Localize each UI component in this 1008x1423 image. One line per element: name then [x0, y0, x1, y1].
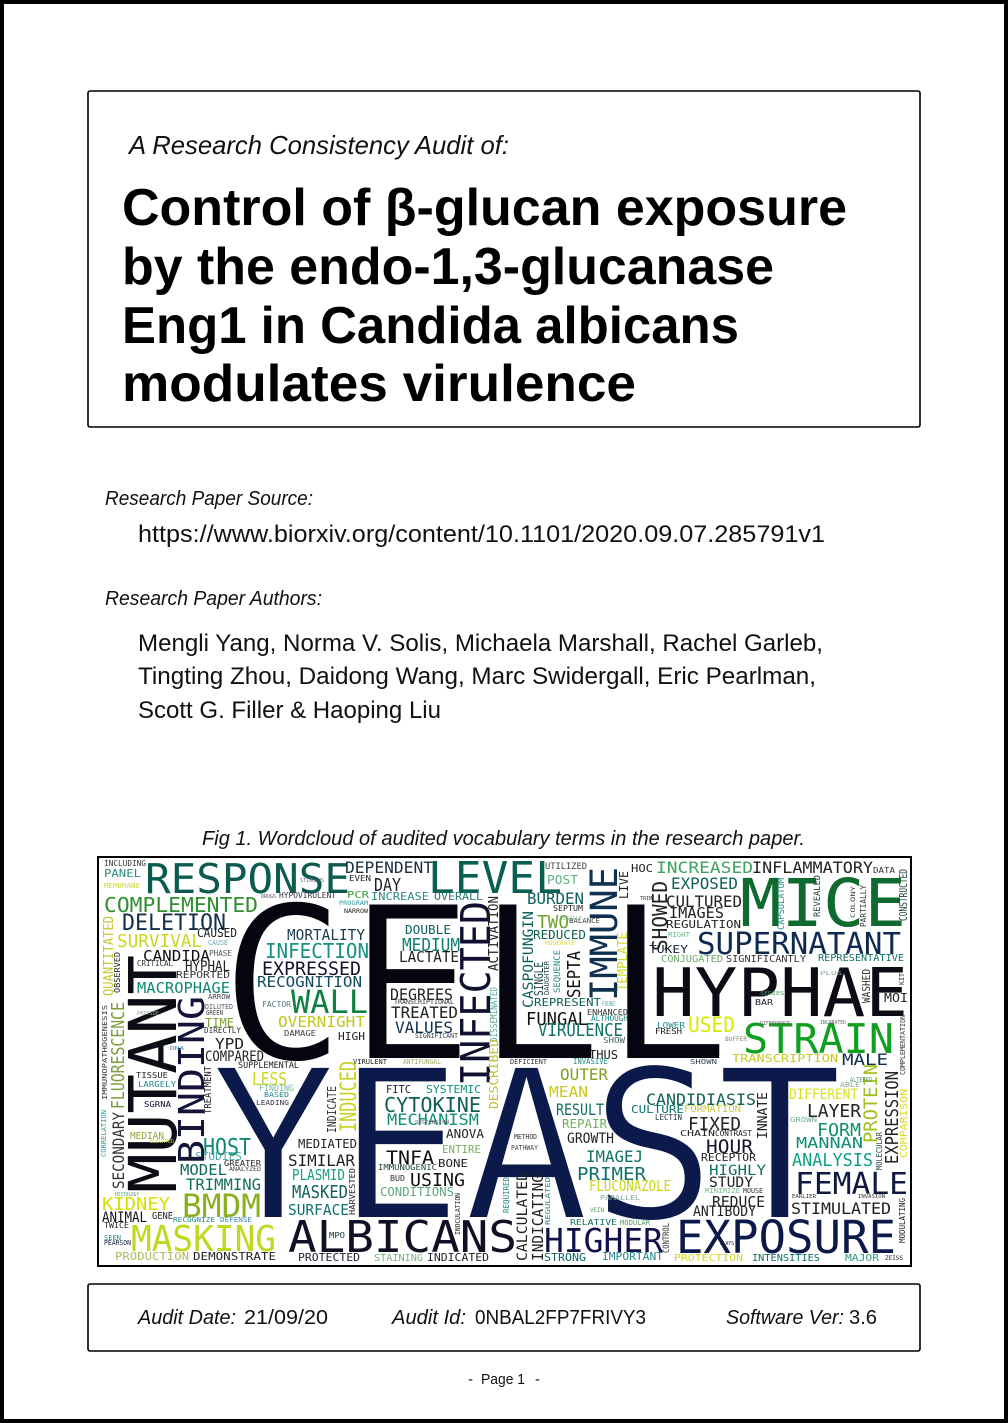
- wordcloud of vocabulary terms: PLAYS: [720, 1241, 734, 1247]
- wordcloud of vocabulary terms: OUTER: [560, 1065, 608, 1084]
- wordcloud of vocabulary terms: ALBICANS: [288, 1212, 517, 1263]
- wordcloud of vocabulary terms: PROTECTED: [298, 1251, 360, 1264]
- wordcloud of vocabulary terms: RECOGNIZE: [173, 1216, 215, 1224]
- wordcloud of vocabulary terms: SURFACE: [288, 1201, 349, 1219]
- wordcloud of vocabulary terms: FITC: [386, 1083, 411, 1096]
- wordcloud of vocabulary terms: INDICATED: [427, 1251, 489, 1264]
- wordcloud of vocabulary terms: TRIM: [640, 896, 652, 902]
- wordcloud of vocabulary terms: PARTIALLY: [859, 885, 868, 927]
- wordcloud of vocabulary terms: SECONDARY: [109, 1112, 128, 1189]
- wordcloud of vocabulary terms: MALE: [842, 1050, 888, 1069]
- wordcloud of vocabulary terms: DESCRIBED: [487, 1039, 501, 1109]
- wordcloud of vocabulary terms: COMPLEMENTATION: [899, 1015, 907, 1075]
- wordcloud of vocabulary terms: PRODUCTION: [115, 1250, 189, 1263]
- wordcloud of vocabulary terms: SEPTUM: [553, 904, 583, 913]
- wordcloud of vocabulary terms: PEARSON: [104, 1239, 131, 1247]
- wordcloud of vocabulary terms: DEPENDENT: [345, 858, 433, 877]
- wordcloud of vocabulary terms: RESPONSE: [145, 855, 350, 903]
- wordcloud of vocabulary terms: SURVIVAL: [117, 931, 202, 952]
- wordcloud of vocabulary terms: DOUBLE: [405, 923, 451, 937]
- wordcloud of vocabulary terms: FORM: [817, 1120, 861, 1141]
- wordcloud of vocabulary terms: FINDING: [259, 1084, 294, 1094]
- page number: [468, 1371, 540, 1388]
- wordcloud of vocabulary terms: LARGELY: [138, 1080, 176, 1089]
- wordcloud of vocabulary terms: REDUCED: [533, 928, 586, 942]
- wordcloud of vocabulary terms: COLONY: [850, 885, 857, 918]
- wordcloud of vocabulary terms: UTILIZED: [545, 862, 587, 872]
- wordcloud of vocabulary terms: CHAIN: [680, 1129, 715, 1138]
- wordcloud of vocabulary terms: INFECTION: [265, 939, 369, 963]
- wordcloud of vocabulary terms: ALTHOUGH: [591, 1014, 628, 1023]
- wordcloud of vocabulary terms: SYSTEMIC: [426, 1083, 481, 1096]
- research paper authors: [105, 588, 823, 724]
- wordcloud of vocabulary terms: PLUS: [820, 971, 842, 977]
- wordcloud of vocabulary terms: MINIMIZE: [705, 1187, 740, 1195]
- wordcloud of vocabulary terms: PLASMID: [292, 1166, 345, 1184]
- wordcloud of vocabulary terms: FEMALE: [795, 1167, 908, 1202]
- wordcloud of vocabulary terms: HOST: [203, 1135, 251, 1161]
- wordcloud of vocabulary terms: INNATE: [756, 1092, 771, 1139]
- wordcloud of vocabulary terms: CAUSE: [208, 939, 228, 947]
- wordcloud of vocabulary terms: OVERNIGHT: [278, 1013, 365, 1031]
- wordcloud of vocabulary terms: INCREASE: [371, 890, 429, 903]
- wordcloud of vocabulary terms: CONTRAST: [715, 1129, 752, 1138]
- wordcloud of vocabulary terms: ABLE: [840, 1081, 860, 1089]
- wordcloud of vocabulary terms: MASKING: [131, 1219, 276, 1260]
- wordcloud of vocabulary terms: BAR: [755, 998, 773, 1007]
- wordcloud of vocabulary terms: INCREASED: [656, 858, 753, 877]
- panel: title box: Eng1 in Candida albicans: [122, 297, 739, 355]
- wordcloud of vocabulary terms: DNA: [170, 1046, 184, 1052]
- wordcloud of vocabulary terms: EXPRESSION: [882, 1071, 903, 1164]
- panel: audit metadata footer: Software Ver:: [726, 1307, 844, 1329]
- wordcloud of vocabulary terms: STRAIN: [743, 1015, 894, 1063]
- wordcloud of vocabulary terms: INFECTED: [452, 901, 500, 1086]
- wordcloud of vocabulary terms: DAY: [374, 875, 401, 896]
- figure caption: Fig 1. Wordcloud of audited vocabulary terms in the research paper.: [202, 828, 805, 850]
- wordcloud of vocabulary terms: STUDIES: [195, 1150, 242, 1163]
- wordcloud of vocabulary terms: ENHANCED: [587, 1008, 628, 1017]
- wordcloud of vocabulary terms: PATHWAY: [511, 1144, 539, 1152]
- wordcloud of vocabulary terms: INDICATE: [325, 1086, 339, 1133]
- wordcloud of vocabulary terms: HISTOLOGY: [115, 1192, 139, 1198]
- wordcloud of vocabulary terms: MEMBRANE: [104, 882, 140, 890]
- wordcloud of vocabulary terms: SGRNA: [144, 1100, 171, 1109]
- wordcloud of vocabulary terms: LOWER: [657, 1021, 685, 1030]
- wordcloud of vocabulary terms: LIVE: [617, 871, 631, 899]
- wordcloud of vocabulary terms: OVERALL: [434, 890, 483, 903]
- wordcloud of vocabulary terms: EXPOSED: [671, 874, 738, 893]
- wordcloud of vocabulary terms: CULTURE: [631, 1103, 684, 1116]
- wordcloud of vocabulary terms: CULTURED: [666, 892, 742, 911]
- wordcloud of vocabulary terms: EXPOSURE: [676, 1211, 896, 1264]
- wordcloud of vocabulary terms: MEAN: [549, 1083, 588, 1101]
- wordcloud of vocabulary terms: YPD: [215, 1035, 244, 1053]
- wordcloud of vocabulary terms: REGULATION: [666, 918, 741, 931]
- wordcloud of vocabulary terms: BONE: [438, 1157, 468, 1170]
- wordcloud of vocabulary terms: INOCULATION: [454, 1193, 462, 1235]
- wordcloud of vocabulary terms: MEDIUM: [402, 935, 460, 956]
- wordcloud of vocabulary terms: HYPOVIRULENT: [279, 891, 336, 900]
- wordcloud of vocabulary terms: ANALYZED: [229, 1166, 261, 1173]
- wordcloud of vocabulary terms: TWICE: [104, 1221, 129, 1230]
- wordcloud of vocabulary terms: VALUES: [395, 1018, 453, 1037]
- wordcloud of vocabulary terms: CONSTRUCTED: [897, 869, 910, 921]
- research paper authors: Tingting Zhou, Daidong Wang, Marc Swidergall, Eric Pearlman,: [138, 663, 816, 690]
- wordcloud of vocabulary terms: MODEL: [180, 1161, 227, 1179]
- wordcloud of vocabulary terms: POST: [547, 873, 578, 887]
- wordcloud of vocabulary terms: HIGHLY: [709, 1163, 767, 1179]
- wordcloud of vocabulary terms: DAMAGE: [284, 1029, 316, 1038]
- wordcloud of vocabulary terms: BASED: [264, 1091, 289, 1099]
- wordcloud of vocabulary terms: TEMPLATE: [616, 932, 631, 991]
- wordcloud of vocabulary terms: HYPHAE: [652, 954, 908, 1032]
- wordcloud of vocabulary terms: MEDIAN: [130, 1131, 164, 1142]
- wordcloud of vocabulary terms: MUTANT: [115, 955, 192, 1193]
- research paper source: [105, 488, 825, 548]
- wordcloud of vocabulary terms: PHASE: [209, 949, 232, 958]
- wordcloud of vocabulary terms: PCR: [347, 890, 370, 901]
- wordcloud of vocabulary terms: MOUSE: [743, 1187, 763, 1195]
- wordcloud of vocabulary terms: HIGH: [338, 1030, 365, 1043]
- wordcloud of vocabulary terms: TNFA: [386, 1147, 435, 1169]
- research paper authors: Scott G. Filler & Haoping Liu: [138, 697, 441, 724]
- wordcloud of vocabulary terms: PANEL: [104, 867, 141, 880]
- wordcloud of vocabulary terms: USED: [688, 1013, 735, 1037]
- wordcloud of vocabulary terms: REPRESENT: [534, 996, 601, 1009]
- wordcloud of vocabulary terms: DISSEMINATED: [489, 987, 500, 1042]
- wordcloud of vocabulary terms: HARVESTED: [348, 1168, 357, 1215]
- wordcloud of vocabulary terms: SINGLE: [532, 962, 546, 996]
- wordcloud of vocabulary terms: RECOGNITION: [257, 973, 362, 991]
- wordcloud of vocabulary terms: GROWN: [790, 1116, 817, 1124]
- wordcloud of vocabulary terms: COMPLEMENTED: [104, 893, 258, 917]
- wordcloud of vocabulary terms: INCUBATED: [820, 1020, 846, 1026]
- wordcloud of vocabulary terms: MACROPHAGE: [137, 979, 230, 997]
- wordcloud of vocabulary terms: TWO: [537, 912, 569, 933]
- wordcloud of vocabulary terms: INCLUDING: [104, 859, 146, 868]
- wordcloud of vocabulary terms: THUS: [589, 1048, 618, 1062]
- wordcloud of vocabulary terms: FIXED: [688, 1114, 741, 1135]
- wordcloud of vocabulary terms: OBSERVED: [113, 952, 122, 993]
- wordcloud of vocabulary terms: WASHED: [860, 969, 873, 1003]
- wordcloud of vocabulary terms: BMDM: [182, 1187, 261, 1225]
- wordcloud of vocabulary terms: ANIMAL: [102, 1210, 147, 1226]
- wordcloud of vocabulary terms: STIMULUS: [300, 878, 324, 884]
- wordcloud of vocabulary terms: CELL: [219, 860, 731, 1111]
- wordcloud of vocabulary terms: DEFENSE: [220, 1216, 252, 1224]
- wordcloud of vocabulary terms: PROGRAM: [339, 900, 368, 907]
- wordcloud of vocabulary terms: KIDNEY: [102, 1194, 170, 1215]
- wordcloud of vocabulary terms: IMMUNOGENIC: [378, 1163, 437, 1172]
- wordcloud of vocabulary terms: CAUSED: [197, 926, 237, 940]
- wordcloud of vocabulary terms: PROTECTION: [674, 1253, 743, 1264]
- wordcloud of vocabulary terms: CONTROL: [662, 1223, 672, 1253]
- wordcloud of vocabulary terms: SHOWN: [690, 1058, 717, 1066]
- wordcloud of vocabulary terms: SHOWED: [648, 881, 672, 951]
- wordcloud of vocabulary terms: SEQUENCE: [553, 950, 563, 993]
- wordcloud of vocabulary terms: SEEN: [104, 1234, 121, 1242]
- wordcloud of vocabulary terms: TRIMMING: [186, 1175, 261, 1194]
- wordcloud of vocabulary terms: INTENSITIES: [752, 1253, 820, 1264]
- panel: title box: A Research Consistency Audit of:: [127, 130, 509, 160]
- wordcloud of vocabulary terms: REDUCE: [712, 1193, 765, 1211]
- wordcloud of vocabulary terms: EXPRESSED: [262, 958, 361, 980]
- wordcloud of vocabulary terms: CORRELATION: [100, 1110, 108, 1157]
- wordcloud of vocabulary terms: ACTIVATION: [487, 896, 502, 971]
- wordcloud of vocabulary terms: LECTIN: [655, 1113, 682, 1122]
- wordcloud of vocabulary terms: INFLAMMATORY: [752, 858, 873, 877]
- wordcloud of vocabulary terms: IMAGES: [669, 904, 724, 922]
- wordcloud of vocabulary terms: IMAGEJ: [586, 1147, 643, 1166]
- wordcloud of vocabulary terms: MASKED: [292, 1182, 348, 1203]
- wordcloud of vocabulary terms: MOI: [884, 991, 908, 1005]
- wordcloud of vocabulary terms: GROWTH: [567, 1131, 614, 1147]
- wordcloud of vocabulary terms: KIT: [898, 972, 906, 985]
- page number: -: [535, 1371, 540, 1388]
- wordcloud of vocabulary terms: PEPTIDE: [137, 1011, 159, 1017]
- wordcloud of vocabulary terms: MEDIATED: [298, 1137, 357, 1151]
- panel: title box: modulates virulence: [122, 355, 636, 413]
- wordcloud of vocabulary terms: RESULT: [556, 1100, 604, 1119]
- wordcloud of vocabulary terms: ANTIBODY: [693, 1204, 757, 1220]
- wordcloud of vocabulary terms: VIRULENT: [353, 1058, 388, 1066]
- panel: audit metadata footer: 0NBAL2FP7FRIVY3: [475, 1307, 646, 1329]
- wordcloud of vocabulary terms: VIRULENCE: [538, 1020, 623, 1041]
- wordcloud of vocabulary terms: TIME: [205, 1016, 234, 1030]
- wordcloud of vocabulary terms: FRESH: [655, 1027, 682, 1036]
- wordcloud of vocabulary terms: FLUORESCENCE: [108, 1002, 129, 1109]
- wordcloud of vocabulary terms: YEAST: [210, 1024, 843, 1269]
- wordcloud of vocabulary terms: SIGNIFICANT: [415, 1032, 459, 1040]
- panel: audit metadata footer: Audit Id:: [391, 1307, 466, 1329]
- wordcloud of vocabulary terms: BUFFER: [725, 1036, 747, 1043]
- wordcloud of vocabulary terms: LEADING: [256, 1099, 289, 1107]
- wordcloud of vocabulary terms: DEFICIENT: [510, 1058, 548, 1066]
- wordcloud of vocabulary terms: METHOD: [514, 1133, 537, 1141]
- wordcloud of vocabulary terms: [98, 853, 911, 1269]
- wordcloud of vocabulary terms: QUANTITATED: [102, 916, 117, 996]
- wordcloud of vocabulary terms: SERIES: [760, 991, 784, 997]
- research paper authors: Mengli Yang, Norma V. Solis, Michaela Marshall, Rachel Garleb,: [138, 630, 823, 657]
- wordcloud of vocabulary terms: PARALLEL: [600, 1194, 640, 1202]
- wordcloud of vocabulary terms: TISSUE: [136, 1071, 168, 1080]
- wordcloud of vocabulary terms: EARLIER: [792, 1194, 817, 1200]
- wordcloud of vocabulary terms: CAPSULATUM: [777, 877, 787, 930]
- wordcloud of vocabulary terms: EVEN: [349, 874, 371, 883]
- wordcloud of vocabulary terms: RECEPTOR: [701, 1151, 756, 1164]
- wordcloud of vocabulary terms: LEVEL: [428, 853, 562, 904]
- wordcloud of vocabulary terms: LESS: [252, 1069, 287, 1090]
- wordcloud of vocabulary terms: ANTIFUNGAL: [403, 1058, 441, 1066]
- wordcloud of vocabulary terms: GENE: [152, 1211, 173, 1222]
- wordcloud of vocabulary terms: STIMULATED: [791, 1199, 891, 1218]
- wordcloud of vocabulary terms: REVEALED: [813, 875, 823, 917]
- wordcloud of vocabulary terms: MODULAR: [620, 1219, 651, 1227]
- wordcloud of vocabulary terms: CYTOKINE: [384, 1093, 481, 1117]
- wordcloud of vocabulary terms: DIRECTLY: [204, 1026, 241, 1035]
- wordcloud of vocabulary terms: DATA: [873, 866, 895, 875]
- wordcloud of vocabulary terms: CASPOFUNGIN: [521, 911, 537, 1008]
- wordcloud of vocabulary terms: CANDIDIASIS: [646, 1090, 756, 1109]
- wordcloud of vocabulary terms: PRIMER: [577, 1164, 646, 1185]
- wordcloud of vocabulary terms: HOUR: [706, 1136, 754, 1158]
- wordcloud of vocabulary terms: GREEN: [206, 1009, 223, 1017]
- wordcloud of vocabulary terms: FOUND: [602, 1000, 615, 1008]
- wordcloud of vocabulary terms: FUNGAL: [526, 1009, 588, 1030]
- wordcloud of vocabulary terms: SUSPENSION: [415, 1120, 449, 1126]
- wordcloud of vocabulary terms: RIGHT: [668, 931, 691, 939]
- wordcloud of vocabulary terms: SUPPLEMENTAL: [238, 1061, 299, 1071]
- wordcloud of vocabulary terms: DILUTED: [205, 1003, 233, 1011]
- wordcloud of vocabulary terms: REPAIR: [562, 1117, 608, 1131]
- wordcloud of vocabulary terms: BINDING: [172, 996, 213, 1164]
- wordcloud of vocabulary terms: DELETION: [122, 911, 226, 936]
- wordcloud of vocabulary terms: TREATED: [391, 1003, 458, 1022]
- wordcloud of vocabulary terms: TRANSCRIPTION: [732, 1052, 838, 1065]
- wordcloud of vocabulary terms: LAYER: [807, 1101, 861, 1122]
- wordcloud of vocabulary terms: NARROW: [344, 908, 368, 915]
- wordcloud of vocabulary terms: ANOVA: [446, 1127, 485, 1141]
- wordcloud of vocabulary terms: MANNAN: [796, 1134, 863, 1152]
- wordcloud of vocabulary terms: TRANSCRIPTIONAL: [394, 999, 454, 1006]
- wordcloud of vocabulary terms: DEGREES: [390, 985, 453, 1004]
- wordcloud of vocabulary terms: VESICLE: [560, 916, 582, 922]
- wordcloud of vocabulary terms: MOLECULAR: [875, 1132, 884, 1170]
- wordcloud of vocabulary terms: HIGHER: [544, 1221, 663, 1260]
- wordcloud of vocabulary terms: STRONG: [544, 1251, 586, 1264]
- panel: title box: [88, 91, 920, 427]
- wordcloud of vocabulary terms: REGULATED: [544, 1177, 552, 1225]
- wordcloud of vocabulary terms: HOC: [631, 862, 653, 875]
- wordcloud of vocabulary terms: INVASION: [858, 1194, 885, 1200]
- wordcloud of vocabulary terms: DIFFERENCE: [760, 1021, 790, 1027]
- wordcloud of vocabulary terms: TUKEY: [649, 943, 688, 956]
- wordcloud of vocabulary terms: MORTALITY: [287, 926, 365, 944]
- wordcloud of vocabulary terms: DAUGHTER: [543, 960, 551, 995]
- wordcloud of vocabulary terms: REPORTED: [176, 970, 230, 981]
- wordcloud of vocabulary terms: SIGNIFICANTLY: [726, 954, 806, 965]
- wordcloud of vocabulary terms: INDUCED: [337, 1061, 362, 1132]
- research paper source: https://www.biorxiv.org/content/10.1101/2020.09.07.285791v1: [138, 521, 825, 548]
- wordcloud of vocabulary terms: PROTEIN: [860, 1064, 882, 1143]
- wordcloud of vocabulary terms: FORMATION: [684, 1104, 741, 1115]
- wordcloud of vocabulary terms: COMPARISON: [899, 1089, 910, 1158]
- wordcloud of vocabulary terms: CRITICAL: [137, 959, 173, 968]
- wordcloud of vocabulary terms: MODULATING: [898, 1198, 907, 1243]
- wordcloud of vocabulary terms: FACTOR: [262, 1000, 291, 1009]
- wordcloud of vocabulary terms: USING: [410, 1170, 465, 1191]
- research paper source: Research Paper Source:: [105, 488, 313, 510]
- wordcloud of vocabulary terms: LACTATE: [399, 948, 459, 966]
- wordcloud of vocabulary terms: VEIN: [590, 1207, 604, 1214]
- wordcloud of vocabulary terms: SEPTA: [564, 951, 585, 998]
- wordcloud of vocabulary terms: REPRESENTATIVE: [818, 953, 904, 964]
- wordcloud of vocabulary terms: MAJOR: [845, 1253, 880, 1264]
- wordcloud of vocabulary terms: COMPARED: [205, 1049, 264, 1065]
- wordcloud of vocabulary terms: ALTERED: [850, 1076, 872, 1084]
- wordcloud of vocabulary terms: MPO: [329, 1231, 345, 1240]
- wordcloud of vocabulary terms: RELATIVE: [570, 1218, 617, 1227]
- wordcloud of vocabulary terms: ANALYSIS: [792, 1150, 873, 1171]
- wordcloud of vocabulary terms: INDICATING: [529, 1174, 547, 1261]
- wordcloud of vocabulary terms: STUDY: [709, 1175, 754, 1191]
- wordcloud of vocabulary terms: CONDITIONS: [380, 1185, 454, 1199]
- page number: Page 1: [481, 1371, 525, 1388]
- panel: audit metadata footer: 3.6: [849, 1307, 877, 1329]
- wordcloud of vocabulary terms: GREATER: [224, 1159, 261, 1168]
- wordcloud of vocabulary terms: REQUIRED: [502, 1177, 511, 1213]
- wordcloud of vocabulary terms: DEMONSTRATE: [193, 1250, 276, 1263]
- wordcloud of vocabulary terms: IMMUNE: [583, 867, 626, 1001]
- wordcloud of vocabulary terms: BURDEN: [527, 889, 584, 908]
- wordcloud of vocabulary terms: IMPORTANT: [602, 1250, 663, 1263]
- wordcloud of vocabulary terms: CALCULATED: [515, 1172, 531, 1261]
- wordcloud of vocabulary terms: FLUCONAZOLE: [589, 1177, 671, 1195]
- wordcloud of vocabulary terms: IMMUNOPATHOGENESIS: [101, 1005, 109, 1100]
- wordcloud of vocabulary terms: INVASIVE: [573, 1057, 608, 1066]
- wordcloud of vocabulary terms: SIMILAR: [288, 1151, 355, 1170]
- wordcloud of vocabulary terms: DRUGS: [261, 894, 276, 900]
- wordcloud of vocabulary terms: CONJUGATED: [661, 954, 723, 965]
- wordcloud of vocabulary terms: ZEISS: [885, 1255, 903, 1262]
- wordcloud of vocabulary terms: CANDIDA: [143, 947, 210, 965]
- panel: title box: by the endo-1,3-glucanase: [122, 238, 774, 296]
- panel: audit metadata footer: Audit Date:: [137, 1307, 236, 1329]
- wordcloud of vocabulary terms: BUD: [390, 1174, 405, 1183]
- panel: audit metadata footer: [88, 1284, 920, 1351]
- wordcloud of vocabulary terms: ELEVATED: [150, 1139, 174, 1145]
- wordcloud of vocabulary terms: HYPHAL: [185, 959, 230, 975]
- wordcloud of vocabulary terms: TREATMENT: [203, 1066, 214, 1114]
- panel: audit metadata footer: 21/09/20: [244, 1307, 328, 1329]
- wordcloud of vocabulary terms: STAINING: [374, 1253, 423, 1264]
- wordcloud of vocabulary terms: WALL: [291, 983, 368, 1021]
- wordcloud of vocabulary terms: ENTIRE: [442, 1143, 481, 1156]
- page number: -: [468, 1371, 473, 1388]
- wordcloud of vocabulary terms: SHOW: [603, 1036, 625, 1045]
- wordcloud of vocabulary terms: MECHANISM: [387, 1110, 479, 1129]
- panel: title box: Control of β-glucan exposure: [122, 179, 847, 237]
- wordcloud of vocabulary terms: BALANCE: [569, 917, 600, 925]
- wordcloud of vocabulary terms: DIFFERENT: [789, 1087, 859, 1103]
- wordcloud of vocabulary terms: SUPERNATANT: [697, 927, 901, 962]
- research paper authors: Research Paper Authors:: [105, 588, 322, 610]
- wordcloud of vocabulary terms: MODERATE: [545, 940, 575, 947]
- wordcloud of vocabulary terms: MICE: [740, 865, 906, 942]
- wordcloud of vocabulary terms: ARROW: [208, 993, 231, 1001]
